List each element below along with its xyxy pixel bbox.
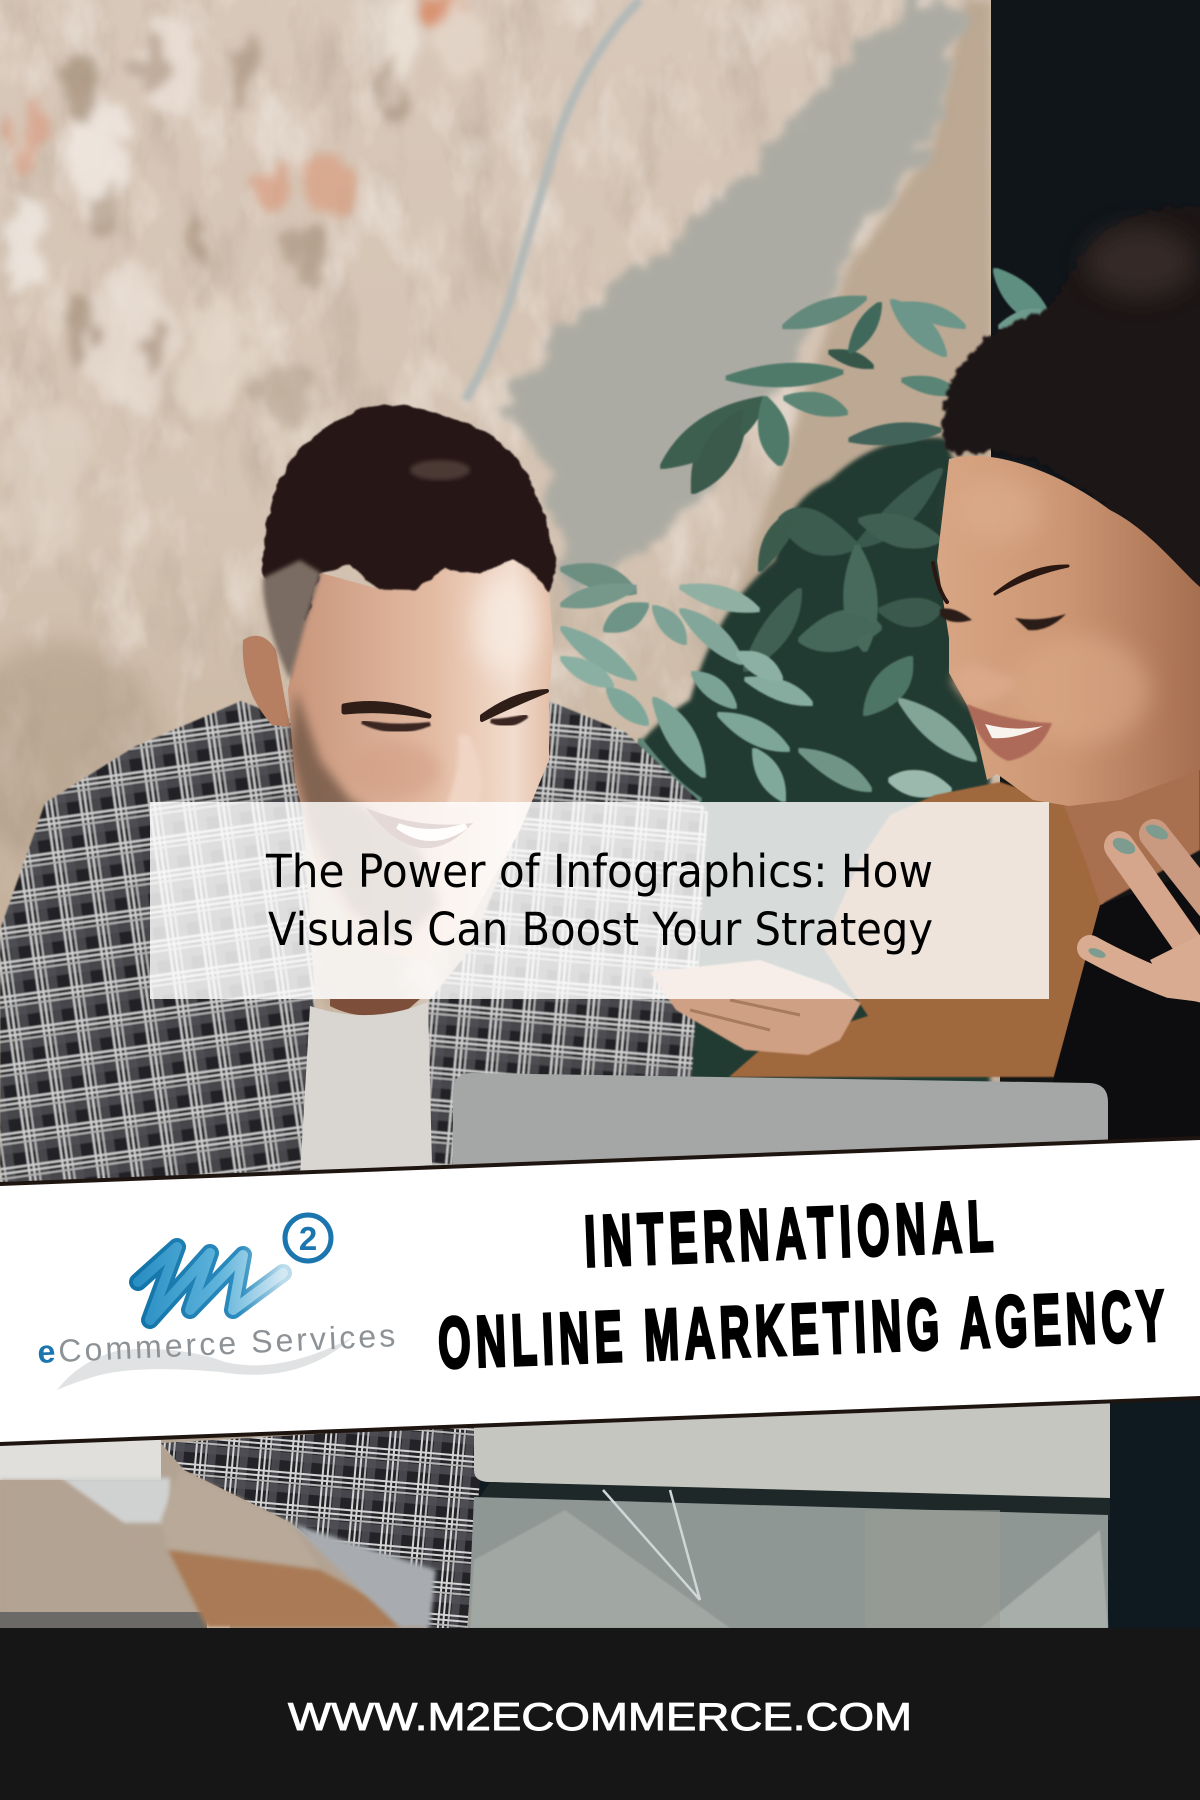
heading line 1: INTERNATIONAL (583, 1187, 995, 1282)
footer bar (0, 1628, 1200, 1800)
woman: blouse (729, 782, 1104, 1077)
title panel (150, 802, 1049, 999)
title text: The Power of Infographics: How (265, 845, 933, 898)
logo: circled 2: 2 (299, 1220, 317, 1257)
man: t-shirt (300, 1002, 432, 1176)
diagonal white banner (0, 1136, 1200, 1446)
man: plaid shirt (0, 701, 708, 1195)
photo: background wall (0, 0, 1000, 1200)
woman: black top (1040, 870, 1200, 1140)
banner heading (433, 1181, 1166, 1384)
woman: neck (1060, 740, 1200, 905)
man: face (288, 558, 553, 961)
woman: right hand (1087, 821, 1200, 1005)
man: ear (243, 636, 290, 727)
footer url: WWW.M2ECOMMERCE.COM (288, 1696, 912, 1739)
title text: Visuals Can Boost Your Strategy (268, 903, 933, 956)
logo: swoosh (57, 1337, 353, 1390)
laptop: lid (453, 1073, 1108, 1200)
woman: left hand (650, 960, 861, 1055)
woman: face (933, 456, 1200, 806)
logo: scribble m (138, 1247, 283, 1320)
logo: m2 eCommerce Services (37, 1215, 396, 1390)
heading line 2: ONLINE MARKETING AGENCY (437, 1276, 1166, 1384)
photo: grey stone band on wall (465, 0, 992, 640)
table: lower scene (0, 1395, 1200, 1630)
photo: dark doorway (991, 0, 1200, 640)
logo: wordmark: eCommerce Services (37, 1317, 396, 1370)
woman: hair (943, 206, 1200, 600)
logo: circled 2 (285, 1215, 331, 1261)
photo: plant (562, 270, 1055, 1090)
man: neck (330, 999, 420, 1016)
man: hair (263, 405, 556, 680)
